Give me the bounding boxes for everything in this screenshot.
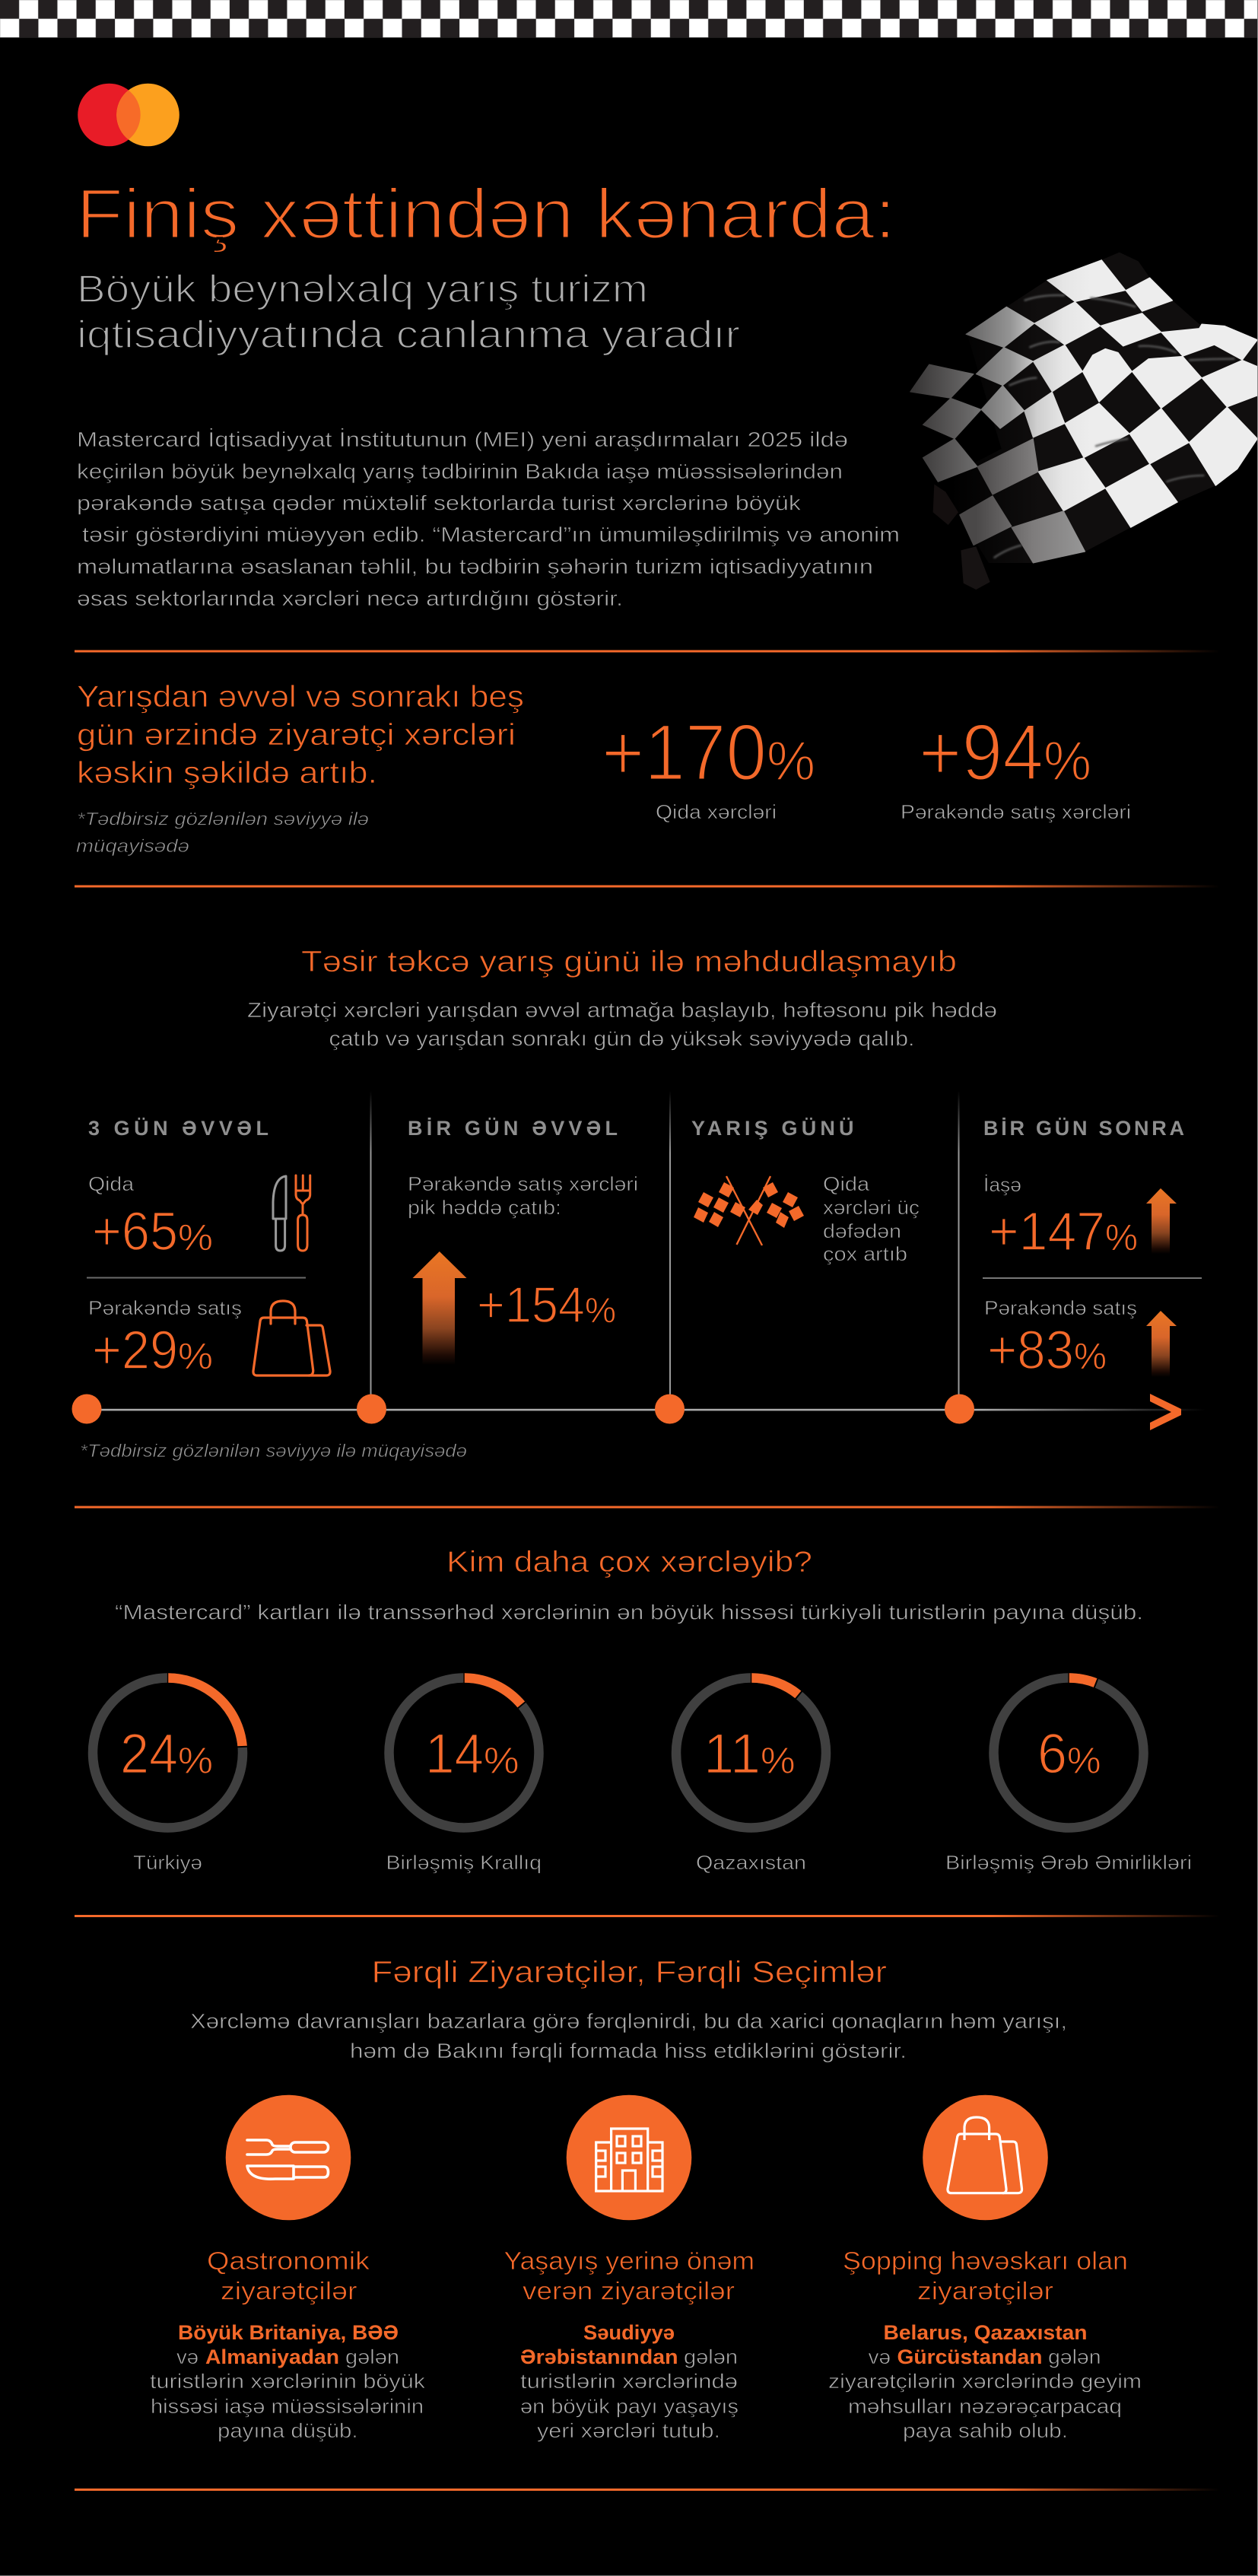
panel: race day: [691, 1117, 920, 1265]
checkered top border: [0, 0, 1258, 37]
icon: shopping bags: [253, 1301, 330, 1375]
intro paragraph: Mastercard İqtisadiyyat İnstitutunun (MEI) yeni araşdırmaları 2025 ildə: [77, 428, 848, 451]
text: food tripled: xərcləri üç: [823, 1196, 920, 1219]
heading: [77, 680, 524, 790]
stat: retail spending +94%: Pərakəndə satış xərcləri: [901, 800, 1131, 823]
text: food tripled: [823, 1172, 920, 1265]
heading: Yaşayış yerinə önəm: [504, 2247, 754, 2275]
text block: turistlərin xərclərində: [520, 2370, 738, 2393]
text: retail peak: Pərakəndə satış xərcləri: [408, 1172, 638, 1195]
heading: impact: Təsir təkcə yarış günü ilə məhdudlaşmayıb: [301, 946, 957, 978]
heading: verən ziyarətçilər: [523, 2276, 735, 2305]
heading: BİR GÜN ƏVVƏL: [408, 1117, 618, 1140]
heading: YARIŞ GÜNÜ: [691, 1117, 853, 1140]
stat: retail +83%: [984, 1296, 1137, 1381]
text block: Ərəbistanından: [520, 2345, 678, 2368]
stat: +154%: %: [585, 1290, 616, 1330]
donut: Birləşmiş Krallıq 14%: %: [484, 1741, 519, 1782]
text block: [150, 2321, 426, 2442]
donut: Türkiyə 24%: [93, 1671, 249, 1874]
text block: və: [176, 2345, 199, 2368]
text: who spent more description: “Mastercard” kartları ilə transsərhəd xərclərinin ən böyük hissəsi türkiyəli turistlərin payına düşüb.: [115, 1601, 1143, 1624]
text block: gələn: [684, 2345, 738, 2368]
arrow: up gradient: [412, 1251, 467, 1365]
footnote: *Tədbirsiz gözlənilən səviyyə ilə: [77, 809, 369, 829]
title: Finiş xəttindən kənarda:: [76, 174, 896, 253]
stat: retail +83%: %: [1074, 1337, 1107, 1377]
stat: retail spending +94%: +94: [919, 708, 1044, 797]
stat: food spending +170%: [602, 708, 815, 823]
text block: Səudiyyə: [583, 2321, 675, 2344]
donut: Türkiyə 24%: 24: [120, 1722, 178, 1785]
panel: gastronomic visitors: [150, 2095, 426, 2442]
heading: Şopping həvəskarı olan: [843, 2247, 1128, 2275]
heading: gün ərzində ziyarətçi xərcləri: [77, 718, 516, 752]
icon: crossed checkered flags: [694, 1176, 804, 1245]
text: impact description: [247, 998, 997, 1050]
intro paragraph: təsir göstərdiyini müəyyən edib. “Mastercard”ın ümumiləşdirilmiş və anonim: [82, 523, 900, 546]
stat: food +65%: +65: [92, 1202, 178, 1262]
heading: who spent more: Kim daha çox xərcləyib?: [446, 1546, 812, 1579]
stat: food spending +170%: +170: [602, 708, 767, 797]
heading: BİR GÜN SONRA: [983, 1117, 1184, 1140]
donut: Qazaxıstan 11%: Qazaxıstan: [696, 1851, 806, 1874]
donut: Qazaxıstan 11%: %: [761, 1741, 796, 1782]
stat: food spending +170%: %: [767, 731, 815, 792]
stat: retail spending +94%: %: [1044, 731, 1091, 792]
text: different visitors description: Xərcləmə davranışları bazarlara görə fərqlənirdi, bu da xarici qonaqların həm yarışı,: [190, 2009, 1067, 2033]
text: food tripled: Qida: [823, 1172, 870, 1195]
icon: shopping bags in orange circle: [923, 2095, 1048, 2220]
text: different visitors description: həm də Bakını fərqli formada hiss etdiklərini göstərir.: [350, 2039, 907, 2062]
arrow: up small 1: [1146, 1188, 1177, 1254]
arrow: up small 2: [1146, 1311, 1177, 1377]
stat: retail +83%: +83: [987, 1321, 1074, 1381]
panel: shopping visitors: [828, 2095, 1142, 2442]
stat: catering +147%: İaşə: [983, 1173, 1021, 1196]
text block: turistlərin xərclərinin böyük: [150, 2370, 426, 2393]
subtitle: Böyük beynəlxalq yarış turizm: [77, 267, 648, 310]
text: impact description: çatıb və yarışdan sonrakı gün də yüksək səviyyədə qalıb.: [329, 1027, 914, 1050]
heading: [207, 2247, 370, 2305]
text block: Belarus, Qazaxıstan: [884, 2321, 1088, 2344]
heading: ziyarətçilər: [221, 2276, 357, 2305]
image: waving checkered flag: [910, 253, 1257, 590]
donut: Türkiyə 24%: %: [178, 1741, 213, 1782]
timeline chart: [71, 1091, 1206, 1430]
text block: və: [869, 2345, 891, 2368]
panel: visitor spending summary: [76, 680, 1131, 857]
icon: knife and fork: [273, 1175, 310, 1251]
text block: payına düşüb.: [218, 2419, 357, 2442]
stat: food +65%: [88, 1172, 213, 1262]
donut: Birləşmiş Ərəb Əmirlikləri 6%: 6: [1037, 1722, 1067, 1785]
text block: Almaniyadan: [205, 2345, 339, 2368]
heading: ziyarətçilər: [917, 2276, 1053, 2305]
text block: ziyarətçilərin xərclərində geyim: [828, 2370, 1142, 2393]
heading: 3 GÜN ƏVVƏL: [88, 1117, 268, 1140]
text: food tripled: çox artıb: [823, 1242, 907, 1265]
heading: Yarışdan əvvəl və sonrakı beş: [77, 680, 524, 714]
donut: Birləşmiş Krallıq 14%: [386, 1671, 542, 1874]
icon: cutlery in orange circle: [226, 2095, 351, 2220]
stat: food +65%: %: [178, 1218, 213, 1258]
intro paragraph: əsas sektorlarında xərcləri necə artırdığını göstərir.: [77, 587, 623, 610]
text: retail peak: [408, 1172, 638, 1219]
heading: Qastronomik: [207, 2247, 370, 2275]
donut: Birləşmiş Krallıq 14%: Birləşmiş Krallıq: [386, 1851, 542, 1874]
heading: [843, 2247, 1128, 2305]
stat: retail +83%: Pərakəndə satış: [984, 1296, 1137, 1319]
text: food tripled: dəfədən: [823, 1220, 901, 1242]
stat: retail +29%: Pərakəndə satış: [88, 1296, 242, 1319]
stat: retail +29%: [88, 1296, 242, 1381]
text block: [520, 2321, 739, 2442]
intro paragraph: məlumatlarına əsaslanan təhlil, bu tədbirin şəhərin turizm iqtisadiyyatının: [77, 555, 873, 578]
stat: catering +147%: [983, 1173, 1138, 1262]
panel: one day before: [408, 1117, 638, 1365]
heading: different visitors: Fərqli Ziyarətçilər, Fərqli Seçimlər: [371, 1955, 887, 1989]
intro paragraph: keçirilən böyük beynəlxalq yarış tədbirinin Bakıda iaşə müəssisələrindən: [77, 460, 843, 483]
panel: accommodation visitors: [504, 2095, 754, 2442]
donut: Birləşmiş Krallıq 14%: 14: [425, 1722, 484, 1785]
stat: retail spending +94%: [901, 708, 1131, 823]
stat: catering +147%: %: [1105, 1218, 1138, 1258]
stat: +154%: +154: [477, 1277, 585, 1334]
text block: Gürcüstandan: [897, 2345, 1042, 2368]
footnote: [76, 809, 369, 857]
text block: ən böyük payı yaşayış: [520, 2395, 739, 2418]
text: retail peak: pik həddə çatıb:: [408, 1196, 561, 1219]
donut: Birləşmiş Ərəb Əmirlikləri 6%: Birləşmiş Ərəb Əmirlikləri: [945, 1851, 1192, 1874]
panel: 3 days before: [87, 1117, 330, 1381]
donut: Qazaxıstan 11%: [676, 1671, 826, 1874]
donut: Birləşmiş Ərəb Əmirlikləri 6%: %: [1067, 1741, 1101, 1782]
subtitle: iqtisadiyyatında canlanma yaradır: [77, 313, 740, 356]
donut: Türkiyə 24%: Türkiyə: [133, 1851, 202, 1874]
intro paragraph: [77, 428, 900, 610]
donut: Qazaxıstan 11%: 11: [704, 1722, 761, 1785]
text block: məhsulları nəzərəçarpacaq: [848, 2395, 1122, 2418]
panel: one day after: [983, 1117, 1202, 1381]
text block: [828, 2321, 1142, 2442]
text: impact description: Ziyarətçi xərcləri yarışdan əvvəl artmağa başlayıb, həftəsonu pik həddə: [247, 998, 997, 1022]
arrow: timeline end: [1150, 1394, 1181, 1430]
stat: retail +29%: +29: [92, 1321, 178, 1381]
stat: food +65%: Qida: [88, 1172, 135, 1195]
text block: gələn: [1048, 2345, 1101, 2368]
text block: gələn: [345, 2345, 399, 2368]
stat: retail +29%: %: [178, 1337, 213, 1377]
stat: food spending +170%: Qida xərcləri: [656, 800, 777, 823]
footnote: timeline: *Tədbirsiz gözlənilən səviyyə ilə müqayisədə: [80, 1441, 467, 1461]
heading: [504, 2247, 754, 2305]
heading: kəskin şəkildə artıb.: [77, 756, 377, 790]
text: different visitors description: [190, 2009, 1067, 2062]
icon: building in orange circle: [567, 2095, 691, 2220]
stat: catering +147%: +147: [989, 1202, 1105, 1262]
donut: Birləşmiş Ərəb Əmirlikləri 6%: [945, 1671, 1192, 1874]
intro paragraph: pərakəndə satışa qədər müxtəlif sektorlarda turist xərclərinə böyük: [77, 491, 802, 514]
subtitle: [77, 267, 740, 356]
footnote: müqayisədə: [76, 836, 189, 857]
text block: hissəsi iaşə müəssisələrinin: [151, 2395, 424, 2418]
text block: paya sahib olub.: [903, 2419, 1068, 2442]
text block: yeri xərcləri tutub.: [537, 2419, 720, 2442]
text block: Böyük Britaniya, BƏƏ: [178, 2321, 399, 2344]
icon: Mastercard logo: [78, 84, 179, 146]
